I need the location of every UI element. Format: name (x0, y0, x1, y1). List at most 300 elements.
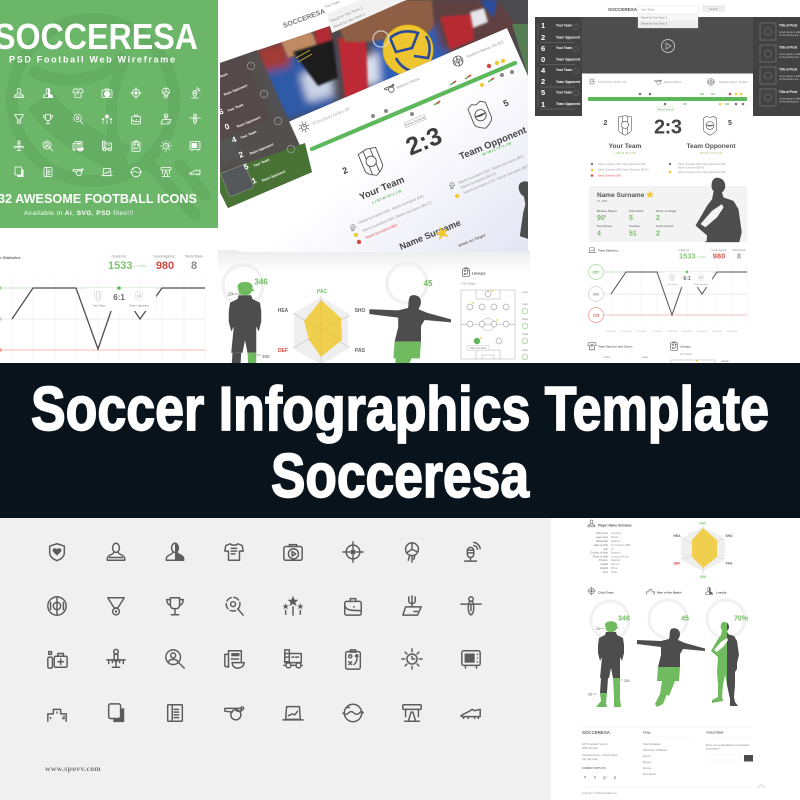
scorers: Name Surname (89') (598, 174, 621, 178)
video header (582, 17, 753, 74)
posts sidebar: Title of Post (779, 68, 798, 72)
footer subscribe column: SUBSCRIBE (706, 730, 724, 734)
score: 2:3 (654, 116, 682, 138)
icon: user half (166, 543, 184, 560)
matches sidebar: Your Team (556, 24, 572, 28)
radar chart: DEF (674, 562, 680, 566)
left matches sidebar: 4 (230, 135, 238, 145)
matches sidebar: 0 (541, 55, 545, 64)
profile keys: First name (596, 531, 609, 535)
line chart: 352 (593, 292, 600, 296)
profile values: 80 kg (611, 566, 618, 570)
line chart: 6:1 (683, 276, 691, 282)
shots label: Shots on Target (458, 233, 487, 248)
icon: medal (108, 598, 124, 615)
team names: Team Opponent (686, 143, 736, 150)
footer brand column: f (584, 774, 586, 780)
info row: Referee Name (664, 80, 682, 84)
figure callouts: 300 (262, 354, 270, 359)
left matches sidebar: 2 (237, 150, 245, 160)
timeline bar (588, 97, 747, 101)
matches sidebar: Your Team (556, 46, 572, 50)
matches sidebar: 2 (541, 77, 545, 86)
posts sidebar: on the printing text (779, 100, 799, 104)
sponsor and lineups headers: 4-3-3 Attack (680, 353, 693, 356)
footer FAQs column: Events (643, 755, 651, 758)
tooltip: Team Opponent (129, 304, 149, 308)
line chart: 27.05.2014 (667, 331, 678, 333)
tooltip: 6:1 (113, 293, 125, 302)
section headings (587, 587, 727, 595)
matches sidebar: 4 (541, 66, 546, 75)
stats figures: 980 (156, 260, 174, 272)
line chart: 657 (593, 270, 600, 274)
section headings: Loyalty (716, 590, 727, 594)
panel: player figures, radar and lineups crop (223, 263, 531, 389)
footer FAQs column: FAQs (643, 730, 651, 734)
player card (589, 178, 747, 259)
icon: shield heart (50, 544, 64, 561)
footer brand column: CONNECT WITH US (582, 767, 606, 770)
stats figures: 8 (191, 260, 197, 272)
ring values: 346 (618, 616, 630, 622)
icon: medical kit (48, 652, 67, 668)
profile values: 12 October 1986 (611, 543, 631, 547)
icon: television (462, 651, 480, 668)
profile keys: Weight (600, 566, 608, 570)
footer subscribe column: Enter your email address for newsletter (706, 744, 750, 747)
matches sidebar: Team Opponent (556, 58, 581, 62)
lineups (461, 268, 531, 360)
score: 2:3 (402, 122, 446, 161)
posts sidebar: Title of Post (779, 90, 798, 94)
player card: Key Passes (597, 224, 612, 228)
photo: soccer action (220, 0, 528, 210)
goals figures (341, 98, 510, 176)
matches sidebar: Your Team (556, 90, 572, 94)
icon: camera (284, 545, 302, 560)
player calf (280, 32, 318, 58)
footer brand column: 24/7 Customer Service (582, 743, 608, 746)
player card: Goals Scored (656, 224, 674, 228)
title: Socceresa (271, 442, 529, 511)
icon: briefcase (345, 599, 361, 615)
form rows: L I W I W I B I L I W (614, 152, 637, 155)
goals: 2 (604, 120, 608, 127)
footer subscribe column: subscription (706, 748, 720, 750)
left matches sidebar: Team (219, 72, 228, 79)
promo line: 32 AWESOME FOOTBALL ICONS (0, 191, 197, 206)
panel: full match page screenshot (535, 5, 800, 366)
footer FAQs column (643, 730, 691, 776)
goal ring 2 (387, 263, 427, 303)
icon grid (14, 88, 200, 177)
team statistics header: 8 (737, 252, 741, 260)
section headings: Man of the Match (657, 590, 682, 594)
profile values: Borthe (611, 535, 619, 539)
panel: green icon promo (0, 0, 218, 228)
staff list: Creator (522, 332, 531, 336)
line chart: 07.05.2014 (621, 331, 632, 333)
value 45: 45 (424, 279, 433, 288)
footer FAQs column: How to Register (643, 743, 661, 746)
left matches sidebar: 6 (217, 107, 225, 117)
line chart: 11.05.2014 (636, 331, 647, 333)
footer (582, 727, 765, 795)
footer brand column: (555) 123-123 (582, 747, 598, 750)
soccer ball (383, 25, 433, 75)
profile values: Right (611, 570, 617, 574)
info row (297, 40, 504, 134)
player card: Total Shots (629, 209, 644, 213)
sponsor and lineups headers: Lineups (680, 344, 691, 348)
team names: L I W I W I B I L I W (371, 189, 402, 205)
profile keys: Date of birth (594, 543, 609, 547)
goal ring (223, 265, 263, 305)
staff list: Players (522, 317, 531, 321)
posts sidebar: on the printing text (779, 56, 799, 59)
matches sidebar: 1 (541, 21, 545, 30)
star (435, 226, 449, 240)
icon: table figure (107, 649, 125, 667)
footer brand column: g+ (603, 776, 607, 780)
goals: 5 (728, 120, 732, 127)
player skin (340, 0, 434, 42)
icon: tactics board (346, 650, 360, 669)
figure callouts: 20 (596, 627, 600, 631)
stats figures: Goals Against (154, 254, 175, 258)
sponsor and lineups headers: Away (642, 356, 649, 359)
icon: chart board (283, 707, 303, 720)
lineups: 4-3-3 Attack (461, 282, 477, 286)
line chart (0, 277, 205, 363)
icon: microphone (465, 542, 480, 561)
goals figures: 5 (502, 98, 510, 109)
team names: Your Team (358, 174, 406, 203)
matches sidebar: Team Opponent (556, 36, 581, 40)
timeline events: Name Surname (658, 108, 674, 111)
icon: cards (109, 704, 124, 722)
radar chart: HEA (673, 534, 681, 538)
back to top chevron (758, 784, 765, 788)
footer brand column: Company Name, 1 Street Name, (582, 754, 619, 757)
scorers: Name Surname (59'), Name Surname (59') (598, 163, 646, 166)
ring values (618, 616, 749, 622)
icon: newspaper (225, 651, 244, 668)
profile values: England (611, 539, 621, 543)
crests (618, 116, 717, 135)
timeline events (639, 93, 744, 111)
left matches sidebar: Team Opponent (236, 115, 262, 129)
team statistics header: World Rank (732, 249, 746, 252)
footer subscribe column (706, 730, 753, 762)
footer FAQs column: Players (643, 761, 652, 764)
staff list (522, 290, 531, 352)
stats figures: Goals For (112, 254, 127, 258)
icon: search ball (226, 597, 243, 615)
player card: Touches (629, 224, 640, 228)
player card: 51 (629, 230, 637, 238)
profile keys: Age (603, 547, 609, 551)
goals (604, 120, 732, 127)
left matches sidebar: Team Opponent (261, 169, 287, 183)
icon: pitch (48, 597, 66, 615)
line chart: 01.05.2014 (606, 331, 617, 333)
dropdown menu: Result for Your Team 1 (330, 6, 363, 23)
player card: Minutes Played (597, 209, 617, 213)
top nav: Search (709, 7, 718, 11)
footer brand column: y (614, 776, 616, 780)
team statistics header: Goals Against (711, 249, 727, 252)
figure callouts: 300 (624, 679, 630, 683)
player card: Shots on Target (656, 209, 676, 213)
icon: stadium podium (48, 709, 66, 721)
matches sidebar: 6 (541, 44, 545, 53)
icon: ticket (168, 705, 182, 721)
panel: player profile page (582, 520, 765, 795)
profile header: Player Name Surname (598, 524, 632, 528)
radar chart: DRI (700, 575, 706, 579)
stats figures (108, 254, 203, 272)
profile header (588, 520, 632, 528)
search dropdown (638, 14, 698, 28)
top nav (608, 5, 725, 14)
footer brand column: t (594, 774, 596, 780)
footer FAQs column: Password / Forbidden (643, 749, 668, 752)
staff list: Coach (522, 290, 530, 294)
line chart: 11.06.2014 (712, 331, 723, 333)
pitch diagram (461, 290, 515, 359)
scorers: Name Surname (59'), Name Surname (90+2') (362, 201, 432, 233)
stats figures: 1533 (108, 260, 132, 272)
info row (588, 78, 748, 85)
sponsor and lineups headers: Captain (721, 360, 730, 363)
matches sidebar: 5 (541, 88, 545, 97)
line chart (588, 264, 747, 333)
red sock (338, 36, 368, 100)
figure: man of the match (637, 628, 705, 707)
left matches sidebar: Your Team (240, 130, 257, 140)
icon: shirt (225, 544, 243, 560)
website credit: www.spovv.com (45, 764, 101, 773)
play button (662, 40, 674, 52)
player silhouette (692, 178, 745, 259)
radar chart (673, 522, 733, 579)
line chart: 21.06.2014 (727, 331, 738, 333)
red sock top (313, 26, 333, 46)
footer brand column: City, Zip Code (582, 758, 598, 761)
team statistics header: Team Statistics (598, 248, 619, 252)
panel: team statistics crop (0, 254, 205, 363)
player card: 90' (597, 215, 607, 222)
brand: SOCCERESA (282, 8, 326, 30)
figure callouts (588, 627, 630, 696)
availability line: Available in Ai, SVG, PSD files!!! (24, 210, 134, 217)
icon: corner field (403, 596, 421, 615)
posts sidebar (753, 17, 800, 116)
left matches sidebar: Your Team (227, 103, 244, 113)
profile keys: Nationality (596, 539, 609, 543)
icon: user (107, 543, 125, 560)
scorers: Name Surname (90+4') (678, 166, 704, 170)
top nav: Your Team (641, 8, 655, 12)
posts sidebar: Title of Post (779, 24, 798, 28)
icon: dugout stand (403, 705, 421, 721)
profile keys: Place of birth (593, 554, 609, 558)
goals figures: 2 (341, 165, 349, 176)
line chart: 118 (593, 312, 600, 318)
matches sidebar: 2 (541, 33, 545, 42)
goal value: 346 (254, 278, 268, 286)
form rows (614, 152, 722, 155)
left matches sidebar: Team Opponent (249, 142, 275, 156)
icon: target (343, 542, 363, 562)
matches sidebar: Team Opponent (556, 80, 581, 84)
search dropdown: Result for Your Team 1 (641, 16, 668, 20)
profile keys: Position (599, 558, 609, 562)
icon: burger ball (343, 704, 363, 722)
staff list: Captain (522, 302, 531, 306)
scorers: Name Surname (73'), Name Surname (89') (463, 164, 529, 195)
profile values: 183 cm (611, 562, 620, 566)
profile keys: Last name (596, 535, 609, 539)
right posts sidebar (497, 0, 528, 25)
player name: Name Surname (398, 218, 462, 252)
footer brand column (582, 730, 619, 780)
player card: Name Surname (597, 192, 645, 199)
team names (358, 125, 529, 205)
copyright: Copyright © 2016 SoccerEsa.com (582, 792, 617, 795)
radar chart (278, 289, 366, 372)
profile keys (590, 531, 609, 574)
heading SOCCERESA: SOCCERESA (0, 16, 198, 57)
radar chart: SHO (725, 534, 733, 538)
staff list: Captain (522, 348, 531, 352)
left matches sidebar (217, 50, 312, 208)
title (31, 375, 769, 511)
scorers: Name Surname (73'), Name Surname (89') (678, 171, 726, 174)
figure: loyalty (711, 622, 739, 706)
icon: football boot (461, 709, 480, 718)
top nav: SOCCERESA (608, 7, 638, 12)
matches sidebar: Team Opponent (556, 102, 581, 106)
stats figures: + (PUPA) (134, 264, 147, 268)
footer FAQs column: Documents (643, 773, 656, 776)
team statistics header: + (PUPA) (696, 256, 707, 259)
figure callouts: 26 (588, 692, 592, 696)
panel: gray icon sheet (0, 518, 551, 800)
player card: 2 (656, 230, 660, 238)
left matches sidebar: 1 (250, 176, 258, 186)
matches sidebar: 1 (541, 100, 545, 109)
banner (0, 363, 800, 518)
line chart: 01.06.2014 (682, 331, 693, 333)
icon: ball speed (406, 543, 418, 562)
figure callouts (228, 292, 270, 359)
team crests (357, 99, 495, 179)
card shadow (218, 250, 530, 272)
search dropdown: Result for Your Team 2 (641, 22, 668, 26)
watermark football logo (12, 19, 205, 215)
team names: W I W I L I P I L I W (482, 141, 512, 157)
scorers: Name Surname (89') (365, 223, 398, 240)
scorers (351, 154, 529, 244)
scorers: Name Surname (65'), Name Surname (89'), (678, 163, 727, 166)
dropdown menu: Result for Your Team 2 (333, 12, 366, 29)
info row: Referee Name (396, 77, 420, 90)
section headings: Club Goals (598, 590, 614, 594)
panel: rotated match page mockup (218, 0, 530, 262)
profile values: Attacker (611, 558, 621, 562)
info row: 07.04.2014 | 10:00 | 18° (598, 80, 627, 84)
radar chart: PAS (355, 348, 366, 354)
stats figures: World Rank (185, 254, 203, 258)
team statistics header: 1533 (679, 252, 696, 260)
matches sidebar: Your Team (556, 68, 572, 72)
icon: foosball player (461, 597, 481, 615)
left matches sidebar: Team Opponent (223, 83, 249, 97)
info row: 07.04.2014 | 10:00 | 18° (312, 107, 351, 126)
ring values: 45 (681, 616, 689, 622)
timeline events: Name Surname (405, 115, 426, 127)
sponsor and lineups headers (588, 342, 730, 366)
player card: 22, ARB (597, 199, 607, 203)
left matches sidebar: 5 (242, 162, 250, 172)
team statistics header (588, 248, 746, 260)
info row: Stadium Name | 90,302 (719, 80, 748, 84)
sponsor and lineups headers: Team Sponsor and Colors (598, 344, 633, 348)
icon: trophy (167, 598, 183, 615)
profile keys: Height (600, 562, 608, 566)
info row: Stadium Name | 90,302 (466, 40, 504, 59)
footer brand column: SOCCERESA (582, 730, 611, 735)
profile values: Cameron (611, 531, 622, 535)
team names (609, 143, 736, 150)
figure callouts: 20 (228, 292, 234, 296)
line chart: Your Team (667, 284, 677, 286)
figure: standing player (229, 282, 261, 389)
tooltip (86, 286, 156, 311)
sponsor and lineups headers: Home (604, 356, 611, 359)
line chart: 21.05.2014 (652, 331, 663, 333)
icon: search user (166, 650, 184, 668)
radar chart: PAS (726, 562, 733, 566)
radar chart: PAC (700, 522, 707, 526)
match timeline bar (312, 63, 515, 149)
timeline events (371, 59, 514, 128)
scorers: Name Surname (90+4') (460, 172, 497, 190)
black sock (293, 40, 338, 86)
line chart: 07.06.2014 (697, 331, 708, 333)
player silhouette (518, 181, 528, 239)
lineups: Name Surname (470, 347, 487, 350)
matches sidebar (535, 17, 582, 116)
footer FAQs column: Service (643, 767, 652, 770)
dropdown menu (326, 0, 412, 33)
profile values (611, 531, 631, 574)
radar chart: SHO (355, 308, 366, 314)
posts sidebar: Title of Post (779, 46, 798, 50)
scorers (591, 163, 727, 178)
lineups: Lineups (472, 272, 485, 276)
profile values: Liverpool (Eng) (611, 554, 629, 558)
play button (373, 31, 389, 47)
scorers: Name Surname (59'), Name Surname (59') (358, 194, 424, 225)
icon: team bus (284, 650, 302, 668)
team statistics header: Goals For (679, 249, 690, 252)
player card: 4 (597, 230, 601, 238)
left matches sidebar: 0 (223, 122, 231, 132)
